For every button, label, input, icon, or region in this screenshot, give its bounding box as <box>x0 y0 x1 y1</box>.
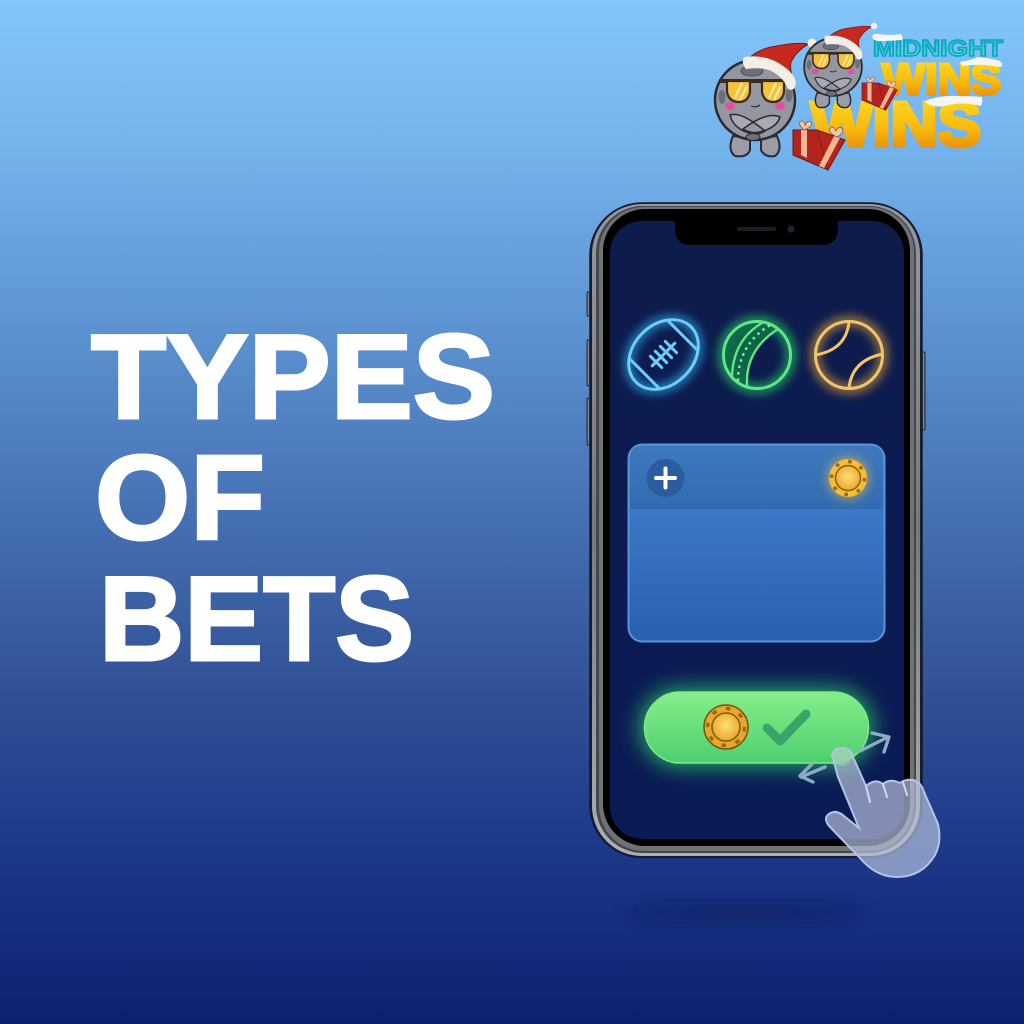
logo wordmark: WINS <box>811 90 981 160</box>
hand finger lines <box>866 782 907 802</box>
logo gift large <box>793 121 845 170</box>
logo wordmark: WINS <box>882 55 1001 104</box>
logo wordmark <box>811 34 1003 160</box>
phone <box>587 203 925 858</box>
icon: american football <box>615 306 712 403</box>
logo large mascot <box>715 38 816 156</box>
title: Types of Bets: OF <box>95 431 265 565</box>
icon: swipe arrows <box>800 733 889 782</box>
logo: Midnight Wins <box>715 23 1003 170</box>
camera <box>788 226 794 232</box>
button glow <box>640 688 873 767</box>
bet card <box>628 444 884 642</box>
logo wordmark: MIDNIGHT <box>873 35 1003 61</box>
confirm button <box>640 688 873 767</box>
notch <box>675 218 838 245</box>
title: Types of Bets: TYPES <box>91 310 495 444</box>
phone shadow <box>625 906 865 918</box>
side buttons <box>587 292 925 445</box>
icon: cricket ball <box>721 321 791 389</box>
hand fingertip highlight <box>833 748 851 766</box>
icon: coin chip <box>827 457 869 499</box>
icon: plus button <box>646 459 684 497</box>
card body <box>628 444 884 642</box>
button pill <box>644 692 868 763</box>
logo gift small <box>862 77 897 110</box>
phone screen <box>610 221 904 839</box>
icon: check mark <box>767 714 806 741</box>
title: Types of Bets: BETS <box>99 552 414 686</box>
icon: coin chip <box>704 705 748 749</box>
icon: tapping hand <box>826 748 939 877</box>
logo small mascot <box>804 23 877 108</box>
card header <box>630 446 883 509</box>
speaker <box>737 227 776 231</box>
phone frame <box>590 203 922 858</box>
title: Types of Bets <box>91 310 495 686</box>
icon: tennis ball <box>815 321 883 389</box>
